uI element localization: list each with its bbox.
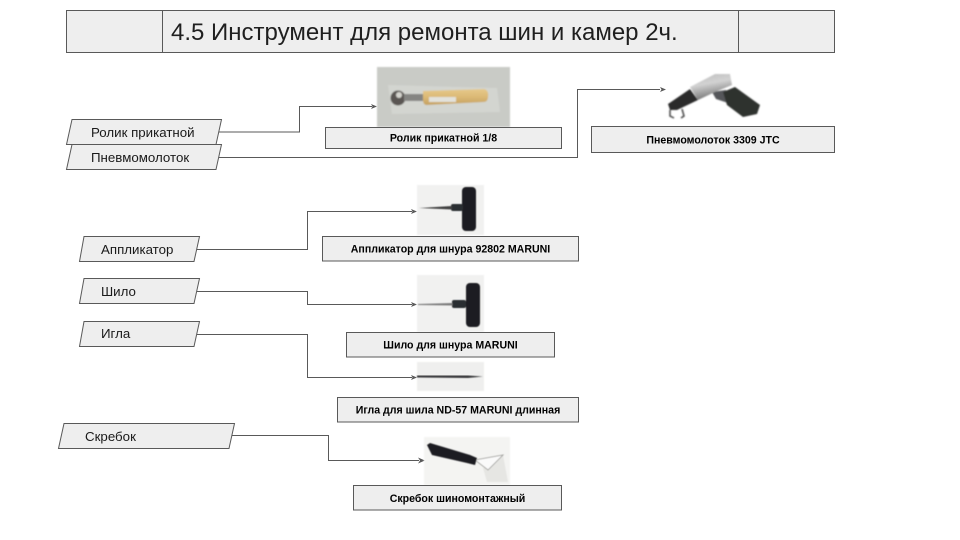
- caption: Ролик прикатной 1/8: [326, 128, 562, 148]
- label: Ролик прикатной: [66, 120, 222, 144]
- caption: Аппликатор для шнура 92802 MARUNI: [322, 236, 578, 261]
- label: Пневмомолоток: [66, 144, 222, 170]
- connector: air hammer: [219, 87, 666, 158]
- caption: Игла для шила ND-57 MARUNI длинная: [338, 398, 578, 422]
- connector: scraper: [231, 436, 425, 464]
- label: Пневмомолоток: Пневмомолоток: [91, 150, 189, 165]
- label: Скребок: Скребок: [85, 429, 136, 444]
- label: Скребок: [58, 424, 234, 448]
- photo: needle: [417, 362, 484, 391]
- label: Аппликатор: Аппликатор: [101, 242, 173, 257]
- label: Игла: Игла: [101, 326, 131, 341]
- photo: scraper: [424, 437, 510, 485]
- photo: awl: [417, 275, 484, 332]
- title bar: [66, 10, 834, 52]
- caption: Пневмомолоток 3309 JTC: Пневмомолоток 3309 JTC: [646, 134, 780, 146]
- photo: hand roller: [377, 67, 510, 127]
- caption: Скребок шиномонтажный: [354, 486, 562, 510]
- title: 4.5 Инструмент для ремонта шин и камер 2ч.: [171, 19, 678, 46]
- caption: Пневмомолоток 3309 JTC: [592, 126, 834, 152]
- connector: awl: [196, 292, 417, 307]
- photo: applicator: [417, 185, 484, 235]
- label: Шило: Шило: [101, 284, 136, 299]
- caption: Шило для шнура MARUNI: Шило для шнура MARUNI: [383, 340, 518, 352]
- caption: Шило для шнура MARUNI: [346, 332, 554, 357]
- photo: air hammer: [668, 74, 760, 118]
- caption: Ролик прикатной 1/8: Ролик прикатной 1/8: [390, 132, 497, 144]
- caption: Скребок шиномонтажный: Скребок шиномонтажный: [390, 493, 525, 505]
- label: Игла: [80, 322, 200, 346]
- label: Ролик прикатной: Ролик прикатной: [91, 125, 195, 140]
- caption: Игла для шила ND-57 MARUNI длинная: Игла для шила ND-57 MARUNI длинная: [356, 404, 560, 416]
- connector: applicator: [196, 209, 417, 250]
- label: Аппликатор: [80, 236, 200, 262]
- label: Шило: [80, 278, 200, 304]
- connector: roller: [219, 104, 377, 132]
- connector: needle: [196, 334, 417, 380]
- caption: Аппликатор для шнура 92802 MARUNI: Аппликатор для шнура 92802 MARUNI: [351, 244, 550, 256]
